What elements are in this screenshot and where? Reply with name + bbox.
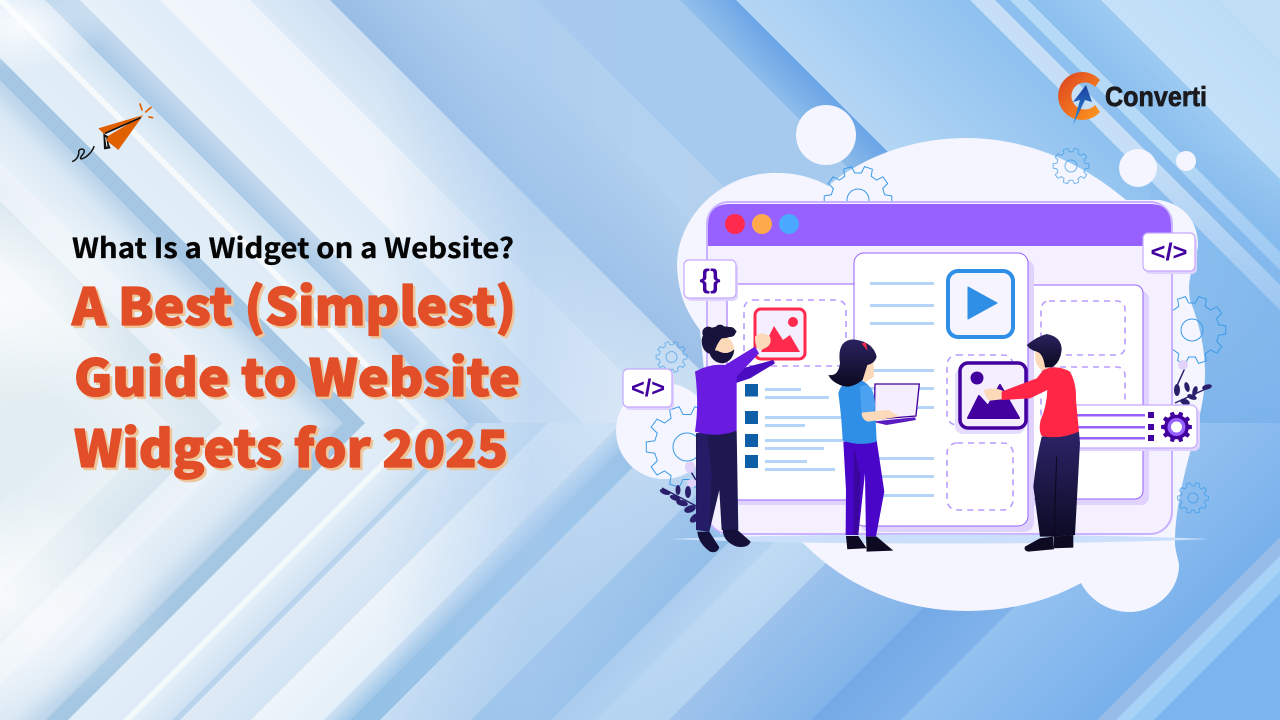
heading block <box>71 227 522 484</box>
icon: settings gear <box>1161 412 1192 442</box>
code tag: right <box>1143 233 1197 274</box>
title line 1: A Best (Simplest) <box>73 268 518 342</box>
panel: left content <box>727 284 867 505</box>
plant: right <box>1174 360 1212 407</box>
dashed placeholder bottom <box>947 443 1013 510</box>
window control dots <box>725 214 799 234</box>
panel: right content <box>1010 285 1149 505</box>
title line 3: Widgets for 2025 <box>76 410 510 484</box>
code tag: braces <box>684 260 738 301</box>
person: woman with laptop <box>828 339 919 552</box>
logo wordmark: Converti <box>1105 81 1207 112</box>
title line 3: Widgets for 2025 <box>74 408 508 482</box>
gears: blue outlines <box>646 148 1226 513</box>
code tag: left <box>623 369 674 410</box>
browser window <box>707 202 1172 534</box>
illustration blob backdrop <box>616 105 1205 612</box>
icon: purple image <box>955 363 1026 434</box>
title line 1: A Best (Simplest) <box>71 266 516 340</box>
person: man in red sweater <box>984 334 1080 552</box>
title line 2: Guide to Website <box>74 337 520 411</box>
window frame <box>707 202 1172 534</box>
panel: center content <box>854 253 1034 532</box>
logo: Converti <box>1058 72 1207 125</box>
text lines <box>870 282 934 497</box>
icon: red image <box>755 309 805 359</box>
ground shadow <box>670 534 1208 544</box>
list rows <box>745 384 843 471</box>
icon: paper plane with squiggle <box>73 104 153 161</box>
window title bar <box>708 204 1171 246</box>
logo mark: ring with arrow <box>1058 72 1100 125</box>
plant: left <box>659 461 702 525</box>
subtitle: What Is a Widget on a Website? <box>72 227 514 267</box>
dashed placeholder top <box>947 355 1013 425</box>
icon: play button <box>948 271 1013 337</box>
title line 2: Guide to Website <box>76 340 522 414</box>
person: bearded man <box>695 325 775 552</box>
widget strip with settings gear <box>1070 405 1200 451</box>
code tag: braces: {} <box>699 264 721 294</box>
code tag: right: </> <box>1150 239 1188 266</box>
code tag: left: </> <box>631 375 665 402</box>
